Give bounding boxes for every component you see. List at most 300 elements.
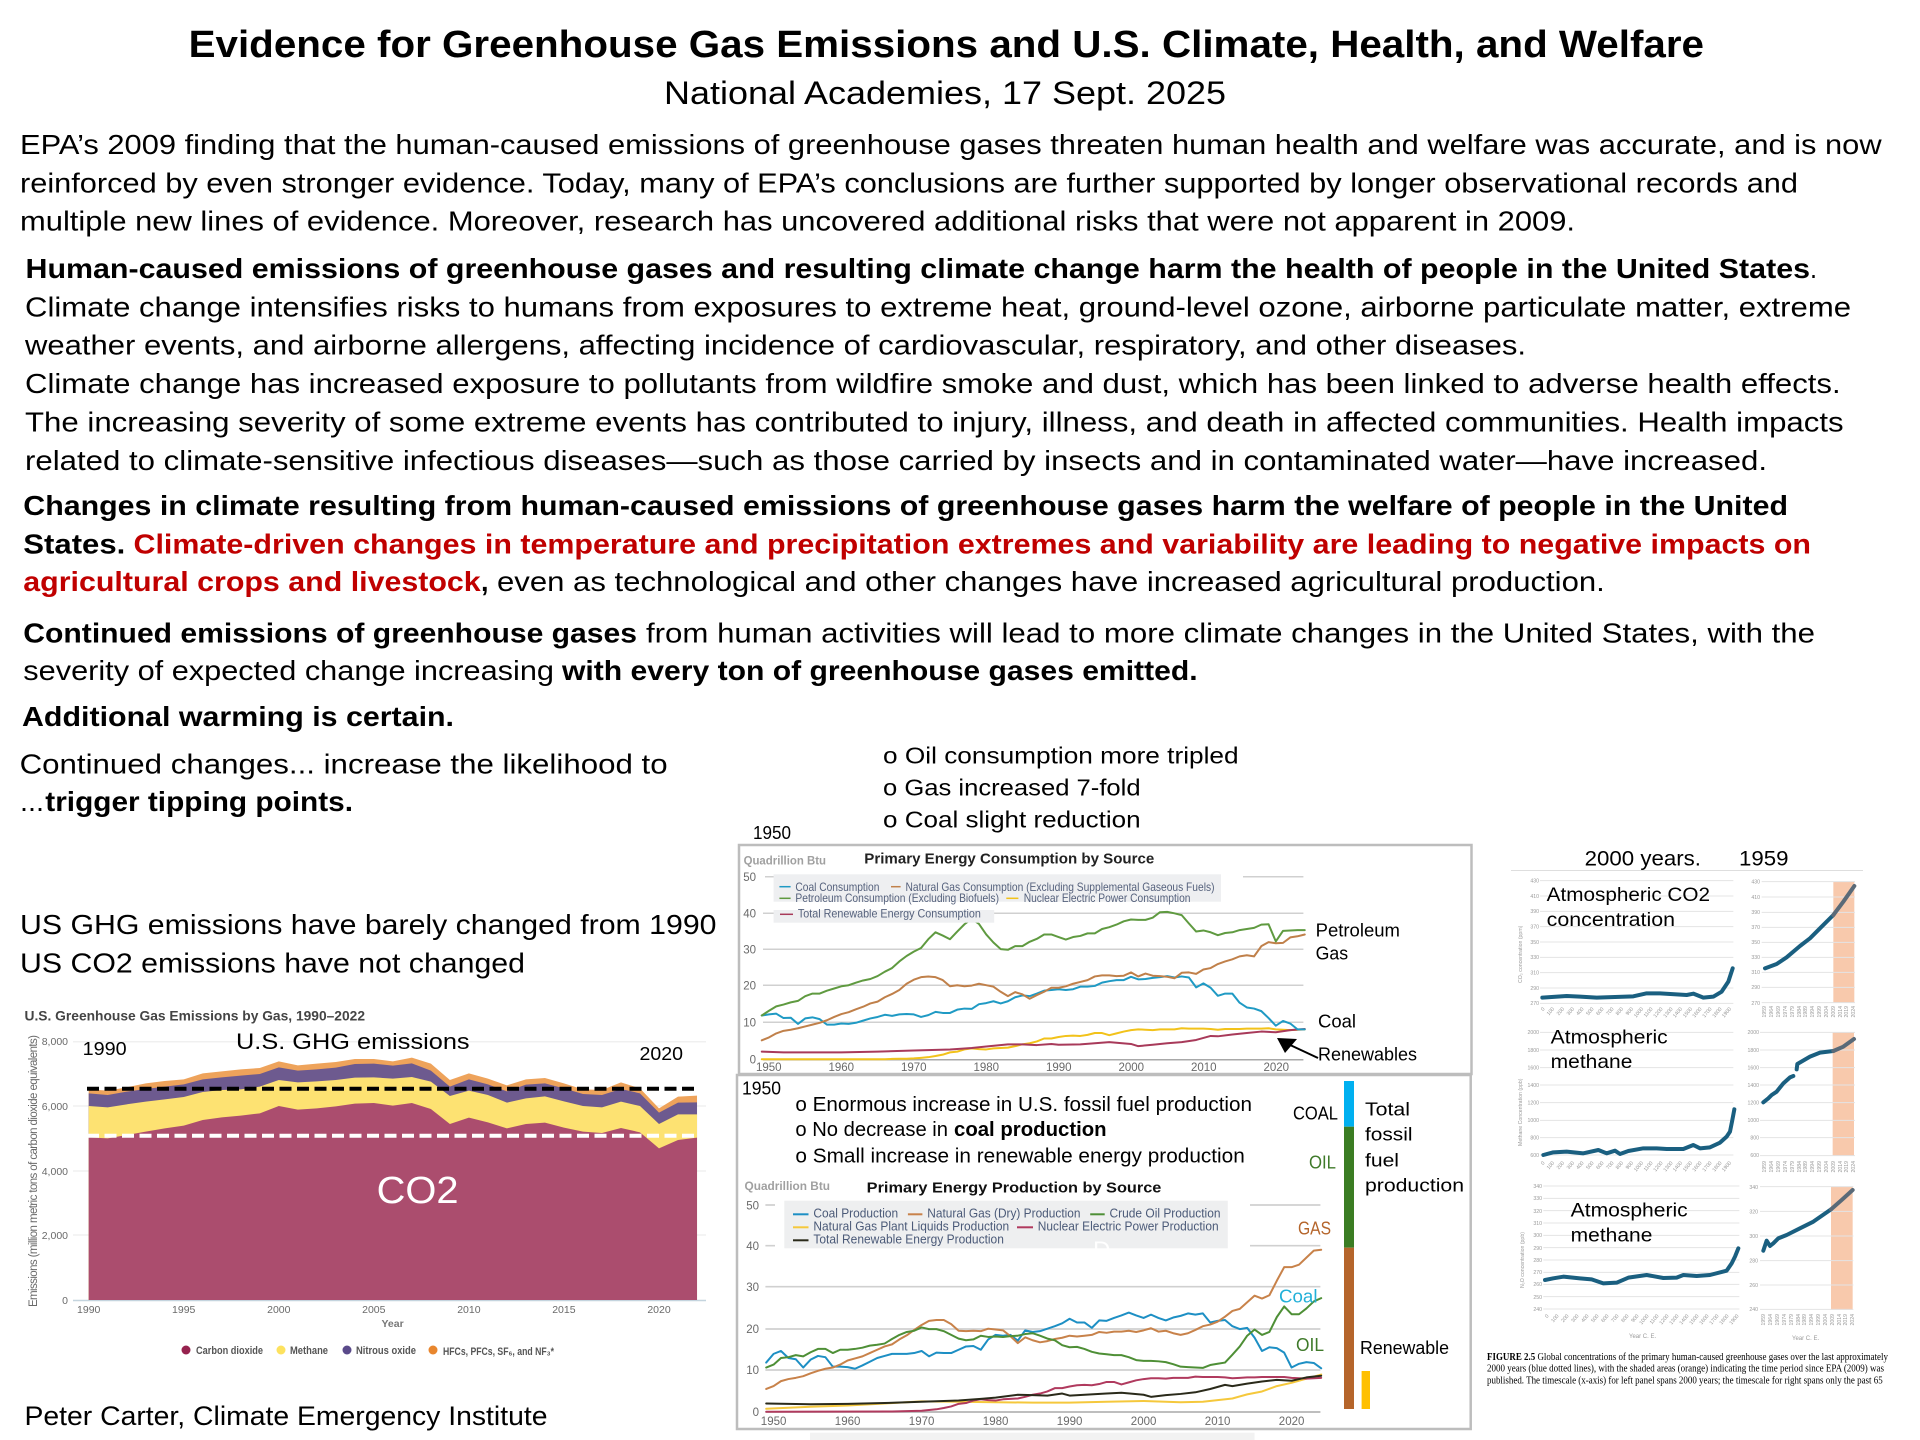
text block: continued emissions: Continued emissions of greenhouse gases: [23, 617, 637, 648]
timescale headers: 2000 years.: [1585, 848, 1701, 871]
text block: health harms: related to climate-sensitive infectious diseases—such as those carried by insects and in contaminated water—have increased.: [25, 445, 1767, 476]
gas labels: [1547, 884, 1710, 1247]
fuel labels: COAL: [1293, 1103, 1338, 1123]
x tick labels: right columns: 1979: [1789, 1314, 1795, 1326]
bar labels: Renewable: [1360, 1338, 1449, 1358]
panel: primary energy production chart: 10: [746, 1365, 759, 1377]
rotated axis titles: N₂O concentration (ppb): [1520, 1232, 1526, 1288]
y tick labels: 1800: [1747, 1048, 1759, 1054]
x tick labels: left columns: 300: [1566, 1006, 1576, 1017]
chart: U.S. GHG emissions stacked area: Year: [381, 1318, 404, 1330]
x tick labels: left columns: 1700: [1709, 1313, 1721, 1326]
x tick labels: right columns: 1979: [1790, 1161, 1796, 1173]
x tick labels: left columns: 400: [1580, 1313, 1591, 1324]
panel: primary energy production chart: 1950: [742, 1078, 781, 1098]
x tick labels: left columns: 1400: [1672, 1006, 1684, 1019]
y tick labels: 330: [1533, 1196, 1542, 1202]
rotated axis titles: Methane Concentration (ppb): [1518, 1078, 1524, 1146]
consumption legend: Total Renewable Energy Consumption: [798, 907, 981, 921]
y tick labels: 290: [1530, 986, 1539, 992]
y tick labels: 350: [1751, 940, 1760, 946]
x tick labels: left columns: 900: [1625, 1160, 1635, 1171]
x tick labels: left columns: [1540, 1006, 1741, 1326]
x tick labels: right columns: 1959: [1762, 1161, 1768, 1173]
x tick labels: right columns: 2004: [1824, 1006, 1830, 1018]
figure caption: published. The timescale (x-axis) for left panel spans 2000 years; the timescale for right spans only the past 65: [1487, 1375, 1883, 1386]
x tick labels: left columns: 300: [1566, 1160, 1576, 1171]
consumption line labels: Coal: [1318, 1012, 1356, 1032]
panel: primary energy consumption chart: Primary Energy Consumption by Source: [864, 850, 1154, 867]
x tick labels: right columns: 1974: [1782, 1314, 1788, 1326]
x tick labels: right columns: 2024: [1851, 1006, 1857, 1018]
x tick labels: left columns: 1300: [1663, 1160, 1675, 1173]
figure caption: [1487, 1352, 1888, 1386]
text block: health harms: Climate change has increased exposure to pollutants from wildfire smoke and dust, which has been linked to adverse health effects.: [25, 368, 1841, 399]
chart: U.S. GHG emissions stacked area: 8,000: [42, 1036, 68, 1048]
consumption line labels: Renewables: [1318, 1045, 1417, 1065]
text block: health harms: .: [1810, 253, 1817, 284]
x tick labels: left columns: 900: [1630, 1313, 1641, 1324]
x tick labels: left columns: 200: [1560, 1313, 1571, 1324]
text block: EPA 2009 finding introduction: [20, 129, 1882, 237]
x tick labels: right columns: 1989: [1802, 1314, 1808, 1326]
x tick labels: left columns: 1000: [1633, 1160, 1645, 1173]
chart annotations: U.S. GHG emissions: [236, 1029, 470, 1054]
x tick labels: left columns: 600: [1595, 1160, 1606, 1171]
figure caption: FIGURE 2.5 Global concentrations of the primary human-caused greenhouse gases over the last approximately: [1487, 1352, 1888, 1363]
x tick labels: left columns: 1200: [1653, 1160, 1665, 1173]
y tick labels: 320: [1533, 1209, 1542, 1215]
legend: gases: Carbon dioxide: [196, 1345, 263, 1357]
text block: health harms: weather events, and airborne allergens, affecting incidence of cardiovascular, respiratory, and other diseases.: [24, 329, 1526, 360]
x tick labels: left columns: 1200: [1653, 1006, 1665, 1019]
production bullets: coal production: [954, 1119, 1107, 1141]
x tick labels: left columns: 1100: [1643, 1160, 1655, 1173]
y tick labels: 1800: [1527, 1048, 1539, 1054]
production bullets: o Enormous increase in U.S. fossil fuel production: [795, 1094, 1252, 1116]
panel: primary energy production chart: Primary Energy Production by Source: [867, 1179, 1161, 1196]
production legend: [784, 1201, 1228, 1264]
label: 1950 above consumption chart: 1950: [753, 823, 791, 843]
legend: gases: Nitrous oxide: [356, 1345, 416, 1357]
chart: U.S. GHG emissions stacked area: 2000: [267, 1304, 291, 1316]
text block: health harms: [24, 253, 1851, 476]
panel: primary energy consumption chart: 30: [743, 944, 756, 956]
text block: EPA 2009 finding introduction: multiple new lines of evidence. Moreover, research has uncovered additional risks that were not apparent in 2009.: [20, 206, 1575, 237]
chart: N2O 2000 years: [1543, 1186, 1739, 1309]
panel: primary energy consumption chart: 2000: [1119, 1062, 1144, 1074]
text block: consumption bullets: o Oil consumption more tripled: [883, 742, 1239, 768]
x tick labels: right columns: 2009: [1831, 1161, 1837, 1173]
fuel labels: OIL: [1309, 1152, 1336, 1172]
text block: consumption bullets: o Coal slight reduction: [883, 806, 1141, 832]
legend: gases: [182, 1345, 555, 1358]
panel: primary energy consumption chart: 0: [750, 1054, 756, 1066]
consumption legend: [774, 874, 1221, 923]
rotated axis titles: CO₂ concentration (ppm): [1518, 925, 1524, 983]
y tick labels: 290: [1533, 1246, 1542, 1252]
chart: methane 2000 years: [1540, 1032, 1734, 1155]
x tick labels: left columns: 1700: [1702, 1160, 1714, 1173]
y tick labels: 410: [1530, 894, 1539, 900]
x tick labels: right columns: 1999: [1817, 1006, 1823, 1018]
y tick labels: 240: [1533, 1307, 1542, 1313]
x tick labels: right columns: 1979: [1790, 1006, 1796, 1018]
text block: continued emissions: severity of expected change increasing: [23, 655, 554, 686]
y tick labels: 310: [1751, 970, 1760, 976]
x tick labels: right columns: 2004: [1824, 1161, 1830, 1173]
production bullets: o Small increase in renewable energy production: [795, 1145, 1245, 1167]
panel: primary energy consumption chart: 1970: [901, 1062, 927, 1074]
panel: primary energy consumption chart: 1990: [1046, 1062, 1072, 1074]
y tick labels: 350: [1530, 940, 1539, 946]
x tick labels: right columns: 1999: [1817, 1161, 1823, 1173]
x tick labels: left columns: 1300: [1663, 1006, 1675, 1019]
x tick labels: right columns: 1969: [1776, 1006, 1782, 1018]
x tick labels: right columns: [1761, 1006, 1857, 1326]
x tick labels: left columns: 200: [1556, 1160, 1566, 1171]
panel: primary energy production chart: 50: [746, 1200, 759, 1212]
chart annotations: CO2: [377, 1170, 459, 1212]
production legend: Nuclear Electric Power Production: [1038, 1220, 1219, 1234]
chart: CO2 since 1959: [1762, 882, 1855, 1003]
chart: U.S. GHG emissions stacked area: 2010: [457, 1304, 481, 1316]
fuel labels: [1279, 1103, 1338, 1355]
x tick labels: left columns: 500: [1590, 1313, 1601, 1324]
x tick labels: right columns: 1989: [1803, 1006, 1809, 1018]
x tick labels: left columns: 1400: [1672, 1160, 1684, 1173]
x tick labels: right columns: 2019: [1844, 1006, 1850, 1018]
title: Evidence for Greenhouse Gas Emissions and U.S. Climate, Health, and Welfare: [189, 24, 1704, 66]
x tick labels: left columns: 1100: [1649, 1313, 1661, 1326]
chart: U.S. GHG emissions stacked area: 6,000: [42, 1101, 68, 1113]
x tick labels: right columns: 1999: [1816, 1314, 1822, 1326]
fuel labels: OIL: [1296, 1335, 1324, 1355]
text block: tipping points: ...: [20, 786, 44, 817]
consumption legend: Petroleum Consumption (Excluding Biofuels): [795, 891, 999, 905]
y tick labels: 410: [1751, 895, 1760, 901]
production legend: Natural Gas (Dry) Production: [927, 1207, 1081, 1221]
x tick labels: left columns: 1000: [1639, 1313, 1651, 1326]
chart: U.S. GHG emissions stacked area: U.S. Greenhouse Gas Emissions by Gas, 1990–2022: [24, 1009, 365, 1024]
x tick labels: left columns: 600: [1595, 1006, 1606, 1017]
x tick labels: right columns: 1959: [1761, 1314, 1767, 1326]
panel: primary energy consumption chart: 50: [743, 872, 756, 884]
chart: U.S. GHG emissions stacked area: 1995: [172, 1304, 196, 1316]
rotated axis titles: Year C. E.: [1792, 1336, 1819, 1342]
y tick labels: 340: [1749, 1185, 1758, 1191]
y tick labels: 600: [1750, 1153, 1759, 1159]
chart: U.S. GHG emissions stacked area: 1990: [77, 1304, 101, 1316]
x tick labels: right columns: 1974: [1783, 1006, 1789, 1018]
panel: primary energy consumption chart: 20: [743, 980, 756, 992]
x tick labels: right columns: 2009: [1830, 1314, 1836, 1326]
x tick labels: left columns: 1900: [1729, 1313, 1741, 1326]
x tick labels: right columns: 2004: [1823, 1314, 1829, 1326]
x tick labels: right columns: 2024: [1851, 1161, 1857, 1173]
rotated axis titles: [1518, 925, 1819, 1342]
y tick labels: 430: [1751, 880, 1760, 886]
panel: primary energy production chart: 30: [746, 1282, 759, 1294]
production bullets: [795, 1094, 1252, 1167]
chart: U.S. GHG emissions stacked area: 2005: [362, 1304, 386, 1316]
y tick labels: 300: [1749, 1234, 1758, 1240]
y tick labels: 1400: [1747, 1083, 1759, 1089]
text block: welfare harms: ,: [481, 566, 488, 597]
panel: primary energy production chart: 2000: [1131, 1416, 1156, 1428]
consumption line labels: Petroleum: [1316, 921, 1400, 941]
gas labels: methane: [1551, 1051, 1632, 1073]
chart: U.S. GHG emissions stacked area: 0: [62, 1295, 68, 1307]
text block: health harms: Human-caused emissions of greenhouse gases and resulting climate change harm the health of people in the United States: [26, 253, 1810, 284]
x tick labels: left columns: 1900: [1721, 1006, 1733, 1019]
consumption lines: [762, 912, 1305, 1059]
panel: primary energy production chart: 1950: [761, 1416, 786, 1428]
y tick labels: 300: [1533, 1233, 1542, 1239]
x tick labels: right columns: 1984: [1797, 1161, 1803, 1173]
y tick labels: 2000: [1527, 1030, 1539, 1036]
x tick labels: right columns: 1994: [1809, 1314, 1815, 1326]
arrow: renewables pointer: [1277, 1038, 1318, 1058]
y tick labels: 340: [1533, 1184, 1542, 1190]
gas labels: concentration: [1547, 909, 1675, 931]
x tick labels: left columns: 200: [1556, 1006, 1566, 1017]
text block: welfare harms: States.: [23, 528, 125, 559]
production legend: Coal Production: [813, 1207, 898, 1221]
bar labels: production: [1365, 1176, 1464, 1196]
y tick labels: 260: [1533, 1282, 1542, 1288]
text block: continued emissions: from human activities will lead to more climate changes in the United States, with the: [646, 617, 1815, 648]
y tick labels: 800: [1750, 1136, 1759, 1142]
production bullets: o No decrease in: [795, 1119, 948, 1141]
panel: primary energy production chart: 1980: [983, 1416, 1008, 1428]
text block: welfare harms: [23, 490, 1811, 597]
chart annotations: [83, 1029, 683, 1212]
x tick labels: left columns: 500: [1585, 1160, 1596, 1171]
panel: primary energy production chart: [737, 1075, 1471, 1440]
x tick labels: left columns: 1100: [1643, 1006, 1655, 1019]
fuel labels: Coal: [1279, 1286, 1318, 1306]
y tick labels: 260: [1749, 1283, 1758, 1289]
x tick labels: left columns: 1500: [1689, 1313, 1701, 1326]
x tick labels: left columns: 1600: [1699, 1313, 1711, 1326]
text block: welfare harms: agricultural crops and livestock: [23, 566, 481, 597]
panel: primary energy consumption chart: 1960: [829, 1062, 854, 1074]
production legend: Crude Oil Production: [1110, 1207, 1221, 1221]
x tick labels: right columns: 1994: [1810, 1006, 1816, 1018]
x tick labels: left columns: 500: [1585, 1006, 1596, 1017]
x tick labels: right columns: 2019: [1844, 1161, 1850, 1173]
x tick labels: left columns: 100: [1550, 1313, 1561, 1324]
text block: welfare harms: Changes in climate resulting from human-caused emissions of greenhouse gases harm the welfare of people in the United: [23, 490, 1788, 521]
x tick labels: left columns: 1800: [1712, 1160, 1724, 1173]
text block: EPA 2009 finding introduction: reinforced by even stronger evidence. Today, many of EPA’s conclusions are further supported by longer observational records and: [20, 168, 1798, 198]
x tick labels: left columns: 400: [1575, 1160, 1586, 1171]
y tick labels: 320: [1749, 1210, 1758, 1216]
x tick labels: left columns: 1700: [1702, 1006, 1714, 1019]
panel: primary energy consumption chart: Quadrillion Btu: [744, 853, 826, 867]
y tick labels: 1200: [1527, 1100, 1539, 1106]
y tick labels: 270: [1530, 1001, 1539, 1007]
x tick labels: left columns: 1800: [1719, 1313, 1731, 1326]
panel: primary energy consumption chart: 10: [743, 1018, 756, 1030]
y tick labels: 330: [1530, 955, 1539, 961]
chart: U.S. GHG emissions stacked area: Emissions (million metric tons of carbon dioxide equivalents): [28, 1035, 40, 1307]
x tick labels: right columns: 1964: [1769, 1006, 1775, 1018]
x tick labels: right columns: 1984: [1797, 1006, 1803, 1018]
y tick labels: 330: [1751, 955, 1760, 961]
y tick labels: 2000: [1747, 1030, 1759, 1036]
text block: tipping points: trigger tipping points.: [45, 786, 353, 817]
x tick labels: left columns: 800: [1615, 1160, 1625, 1171]
rotated axis titles: Year C. E.: [1629, 1334, 1656, 1340]
x tick labels: left columns: 400: [1575, 1006, 1586, 1017]
panel: primary energy production chart: 1970: [909, 1416, 934, 1428]
x tick labels: right columns: 2009: [1831, 1006, 1837, 1018]
x tick labels: right columns: 1974: [1783, 1161, 1789, 1173]
gas labels: Atmospheric CO2: [1547, 884, 1710, 906]
gas labels: Atmospheric: [1551, 1026, 1668, 1048]
x tick labels: left columns: 600: [1600, 1313, 1611, 1324]
bar labels: Total: [1365, 1100, 1410, 1120]
x tick labels: left columns: 1600: [1692, 1006, 1704, 1019]
x tick labels: right columns: 1984: [1796, 1314, 1802, 1326]
x tick labels: left columns: 100: [1546, 1006, 1556, 1017]
x tick labels: right columns: 1969: [1776, 1161, 1782, 1173]
y tick labels: 370: [1751, 925, 1760, 931]
x tick labels: left columns: 1300: [1669, 1313, 1681, 1326]
text block: tipping points: Continued changes... increase the likelihood to: [20, 748, 668, 779]
panel: primary energy production chart: 0: [753, 1407, 759, 1419]
y tick labels: 250: [1533, 1295, 1542, 1301]
panel: primary energy consumption chart: [739, 845, 1472, 1074]
x tick labels: left columns: 1500: [1682, 1160, 1694, 1173]
text block: health harms: The increasing severity of some extreme events has contributed to injury, illness, and death in affected communities. Health impacts: [25, 407, 1844, 438]
text block: US emissions statement: US CO2 emissions have not changed: [20, 947, 525, 978]
bar labels: fossil: [1365, 1125, 1412, 1145]
y tick labels: 270: [1533, 1270, 1542, 1276]
panel: primary energy production chart: 20: [746, 1324, 759, 1336]
chart: U.S. GHG emissions stacked area: 4,000: [42, 1166, 68, 1178]
x tick labels: right columns: 1964: [1768, 1314, 1774, 1326]
text block: continued emissions: with every ton of greenhouse gases emitted.: [561, 655, 1198, 686]
chart: U.S. GHG emissions stacked area: 2,000: [42, 1230, 68, 1242]
panel: primary energy production chart: 2010: [1205, 1416, 1230, 1428]
production legend: Natural Gas Plant Liquids Production: [813, 1220, 1009, 1234]
text block: welfare harms: even as technological and other changes have increased agricultural production.: [497, 566, 1605, 597]
y tick labels: 800: [1530, 1136, 1539, 1142]
legend: gases: Methane: [290, 1345, 328, 1357]
chart annotations: 2020: [640, 1044, 683, 1064]
x tick labels: left columns: 800: [1620, 1313, 1631, 1324]
production lines: [766, 1250, 1321, 1412]
y tick labels: 390: [1751, 910, 1760, 916]
gas labels: methane: [1571, 1225, 1652, 1247]
x tick labels: left columns: 900: [1625, 1006, 1635, 1017]
text: additional warming: Additional warming is certain.: [22, 701, 454, 732]
x tick labels: right columns: 2024: [1850, 1314, 1856, 1326]
consumption legend: Nuclear Electric Power Consumption: [1024, 891, 1190, 905]
panel: primary energy production chart: 1990: [1057, 1416, 1082, 1428]
x tick labels: right columns: 2014: [1838, 1006, 1844, 1018]
panel: primary energy consumption chart: 40: [743, 908, 756, 920]
panel: primary energy production chart: 40: [746, 1241, 759, 1253]
x tick labels: right columns: 2014: [1838, 1161, 1844, 1173]
consumption legend: Coal Consumption: [795, 880, 879, 894]
panel: primary energy production chart: 1960: [835, 1416, 860, 1428]
text block: EPA 2009 finding introduction: EPA’s 2009 finding that the human-caused emissions of greenhouse gases threaten human health and welfare was accurate, and is now: [20, 129, 1882, 160]
figure caption: 2000 years (blue dotted lines), with the shaded areas (orange) indicating the time period since EPA (2009) was: [1487, 1364, 1884, 1375]
timescale headers: 1959: [1739, 848, 1788, 871]
stacked areas: [89, 1058, 697, 1300]
subtitle: National Academies, 17 Sept. 2025: [664, 75, 1226, 111]
chart: methane since 1959: [1760, 1032, 1855, 1156]
text block: health harms: Climate change intensifies risks to humans from exposures to extreme heat, ground-level ozone, airborne particulate matter, extreme: [25, 291, 1851, 322]
y tick labels: 290: [1751, 985, 1760, 991]
bar labels: fuel: [1365, 1151, 1399, 1171]
legend: gases: HFCs, PFCs, SF₆, and NF₃*: [443, 1346, 555, 1358]
text block: US emissions statement: [20, 909, 716, 978]
timescale headers: [1511, 848, 1863, 871]
x tick labels: left columns: 700: [1610, 1313, 1621, 1324]
y tick labels: [1527, 878, 1760, 1313]
x tick labels: left columns: 1800: [1712, 1006, 1724, 1019]
panel: primary energy consumption chart: 1950: [756, 1062, 782, 1074]
text block: consumption bullets: o Gas increased 7-fold: [883, 775, 1141, 801]
y tick labels: 240: [1749, 1307, 1758, 1313]
text block: continued emissions: [23, 617, 1815, 686]
y tick labels: 1600: [1747, 1066, 1759, 1072]
chart: U.S. GHG emissions stacked area: [24, 1009, 706, 1358]
gas labels: Atmospheric: [1571, 1200, 1688, 1222]
panel: primary energy production chart: Quadrillion Btu: [744, 1179, 830, 1193]
x tick labels: left columns: 1200: [1659, 1313, 1671, 1326]
x tick labels: right columns: 1969: [1775, 1314, 1781, 1326]
consumption line labels: [1316, 921, 1417, 1065]
text block: consumption bullets: [883, 742, 1239, 832]
text block: tipping points: [20, 748, 668, 817]
x tick labels: right columns: 1989: [1803, 1161, 1809, 1173]
panel: primary energy consumption chart: 1980: [974, 1062, 999, 1074]
y tick labels: 1000: [1747, 1118, 1759, 1124]
x tick labels: left columns: 1400: [1679, 1313, 1691, 1326]
x tick labels: left columns: 1900: [1721, 1160, 1733, 1173]
y tick labels: 600: [1530, 1153, 1539, 1159]
stacked fuel bar: [1344, 1081, 1370, 1409]
text block: US emissions statement: US GHG emissions have barely changed from 1990: [20, 909, 716, 940]
y tick labels: 280: [1749, 1258, 1758, 1264]
y tick labels: 310: [1530, 970, 1539, 976]
x tick labels: left columns: 800: [1615, 1006, 1625, 1017]
panel: atmospheric concentrations: [1487, 848, 1888, 1386]
x tick labels: left columns: 1500: [1682, 1006, 1694, 1019]
y tick labels: 370: [1530, 924, 1539, 930]
y tick labels: 270: [1751, 1001, 1760, 1007]
x tick labels: right columns: 1994: [1810, 1161, 1816, 1173]
x tick labels: left columns: 0: [1540, 1160, 1547, 1166]
x tick labels: left columns: 0: [1544, 1313, 1551, 1319]
production legend: Total Renewable Energy Production: [813, 1232, 1004, 1246]
chart: CO2 2000 years: [1540, 881, 1733, 1003]
attribution: Peter Carter, Climate Emergency Institute: [24, 1401, 548, 1431]
y tick labels: 280: [1533, 1258, 1542, 1264]
chart: U.S. GHG emissions stacked area: 2020: [647, 1304, 671, 1316]
chart: N2O since 1959: [1760, 1187, 1853, 1310]
x tick labels: left columns: 700: [1605, 1160, 1616, 1171]
x tick labels: right columns: 1964: [1769, 1161, 1775, 1173]
y tick labels: 390: [1530, 909, 1539, 915]
dashed reference lines: [87, 1089, 698, 1136]
